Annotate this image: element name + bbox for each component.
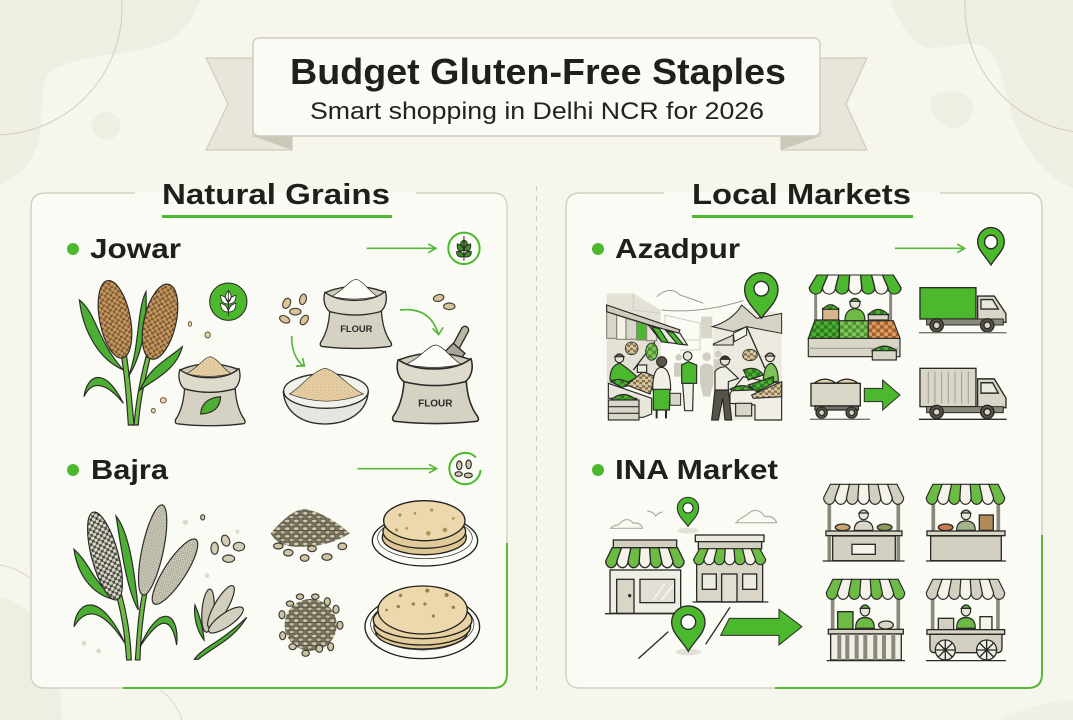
small millet sprig: [194, 583, 247, 659]
roti plate bottom: [365, 586, 480, 659]
clouds and birds: [611, 510, 777, 528]
ina market illustrations: [605, 484, 1006, 661]
ribbon left: [206, 58, 292, 150]
ina market label: INA Market: [615, 454, 778, 485]
panel: natural grains: [31, 193, 507, 688]
large flour sack: [393, 330, 478, 424]
crate: [608, 394, 639, 420]
arrow: [367, 244, 436, 253]
road lines: [638, 607, 730, 659]
stall bottom left: [826, 579, 905, 661]
shopper in green shirt: [682, 352, 697, 411]
section: azadpur: [592, 228, 1007, 420]
title text: Budget Gluten-Free Staples: [290, 51, 786, 92]
icon: seed badge: [449, 453, 481, 484]
heading: natural grains: Natural Grains: [162, 179, 390, 211]
title banner: [206, 38, 867, 150]
arrow: [895, 244, 965, 253]
azadpur illustrations: [607, 228, 1007, 420]
left vendor: [610, 354, 637, 383]
small sack: [175, 357, 245, 426]
section: ina market: [592, 454, 1006, 661]
right stall goods: [730, 368, 782, 420]
pin over scene: [745, 273, 778, 318]
left stall goods: [608, 365, 655, 417]
right shop awning: [694, 549, 766, 565]
left shop awning: [606, 548, 684, 568]
loose seeds: [201, 515, 245, 562]
pin hole: [754, 281, 769, 296]
icon: green leaf circle: [210, 283, 247, 320]
arrows: [292, 310, 443, 366]
hanging produce: [625, 342, 757, 361]
arrow: [358, 464, 437, 473]
left shop: [605, 540, 682, 614]
produce stall: [808, 275, 901, 360]
azadpur label: Azadpur: [615, 233, 740, 264]
column divider: [536, 186, 538, 690]
green truck: [919, 288, 1007, 333]
sorghum plant: [79, 278, 184, 425]
cart: [810, 379, 870, 419]
subtitle: Smart shopping in Delhi NCR for 2026: [310, 98, 764, 125]
bajra label: [67, 454, 168, 485]
jowar label: Jowar: [90, 233, 181, 264]
seed pile bottom: [279, 594, 343, 656]
panel: local markets: [566, 193, 1042, 688]
market scene: [607, 273, 782, 420]
street background: [607, 293, 661, 383]
crate behind shopper: [670, 393, 681, 405]
stall green top right: [926, 484, 1006, 561]
right shop: [693, 535, 768, 602]
right canopy: [712, 305, 782, 368]
label: flour: FLOUR: [418, 398, 452, 409]
green arrow: [864, 380, 900, 410]
jowar illustrations: [79, 233, 480, 426]
loose grains: [151, 322, 210, 413]
left awning: [607, 305, 687, 370]
shopper at right: [712, 356, 738, 420]
large pin: [672, 606, 705, 655]
stall grey: [823, 484, 905, 561]
ribbon right: [781, 58, 867, 150]
label: flour: FLOUR: [340, 324, 373, 334]
background people: [674, 351, 722, 397]
grey truck: [919, 368, 1007, 419]
seed pile top: [271, 509, 350, 561]
icon: location pin: [978, 228, 1004, 265]
heading: local markets: Local Markets: [692, 179, 911, 211]
food cart: [926, 579, 1006, 661]
section: bajra: [67, 453, 481, 660]
bowl: [283, 368, 368, 424]
seeds: [278, 293, 455, 326]
shopper in green skirt: [653, 357, 671, 418]
right vendor: [763, 353, 778, 382]
millet plant: [74, 503, 205, 660]
section: jowar: [67, 233, 480, 426]
bajra illustrations: [74, 453, 481, 660]
icon: leaf badge: [448, 233, 480, 264]
roti plate top: [372, 501, 478, 566]
green arrow: [721, 609, 802, 645]
bajra label: Bajra: [91, 454, 168, 485]
small pin: [677, 497, 699, 534]
flour sack top: [320, 279, 392, 348]
leaf on sack: [201, 397, 221, 414]
